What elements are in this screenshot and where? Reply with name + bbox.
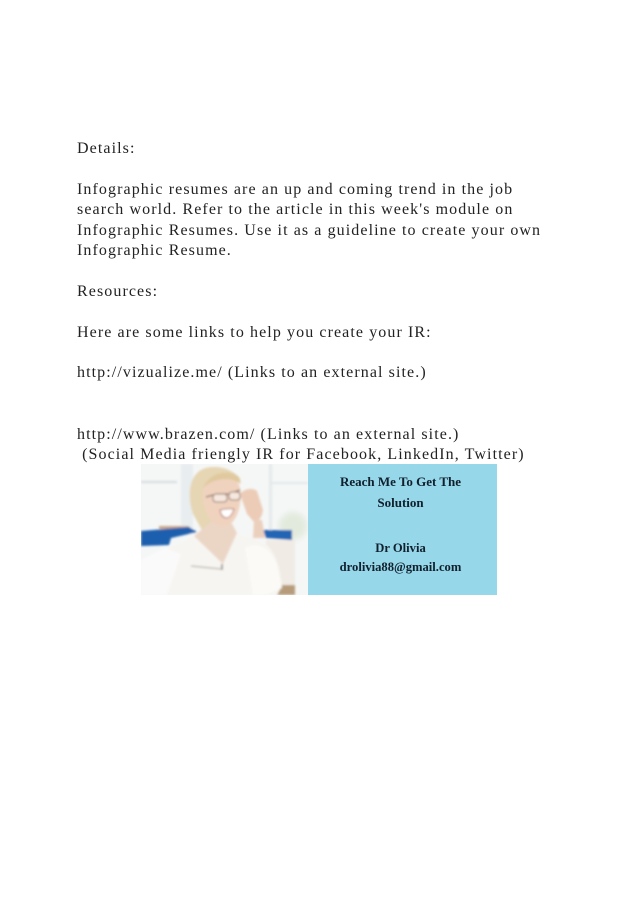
heading: resources: Resources: bbox=[77, 283, 158, 300]
photo: smiling woman with glasses bbox=[141, 464, 308, 595]
text block: brazen link: http://www.brazen.com/ (Links to an external site.) (Social Media friengly IR for Facebook, LinkedIn, Twitter) bbox=[77, 426, 525, 463]
text: contact name and email: Dr Olivia drolivia88@gmail.com bbox=[340, 541, 461, 574]
panel: contact card bbox=[308, 464, 497, 595]
text: call to action: Reach Me To Get The Solution bbox=[340, 474, 461, 510]
text block: description: Infographic resumes are an up and coming trend in the job search world. Refer to the article in this week's module on Infographic Resumes. Use it as a guideline to create your own Infographic Resume. bbox=[77, 181, 541, 259]
text block: vizualize link: http://vizualize.me/ (Links to an external site.) bbox=[77, 364, 427, 381]
heading: details: Details: bbox=[77, 140, 136, 157]
text block: links intro: Here are some links to help you create your IR: bbox=[77, 324, 432, 341]
